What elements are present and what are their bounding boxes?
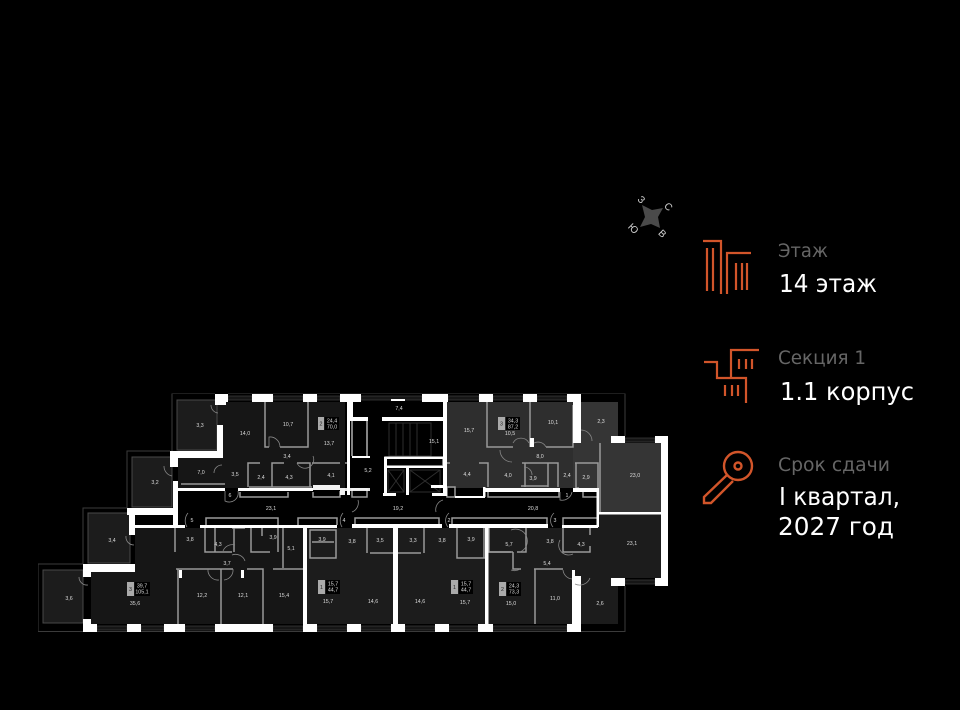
badge 73,3 <box>499 582 521 596</box>
room area labels: 3,2 <box>151 480 159 486</box>
room area labels: 3,3 <box>409 538 417 544</box>
badge 105,1: 105,1 <box>135 590 149 596</box>
room area labels: 10,1 <box>548 420 558 426</box>
room area labels: 4,3 <box>577 542 585 548</box>
room area labels: 23,1 <box>266 506 276 512</box>
room area labels: 2,4 <box>563 473 571 479</box>
room area labels: 1 <box>566 493 569 499</box>
room area labels: 14,0 <box>240 431 250 437</box>
room area labels: 10,5 <box>505 431 515 437</box>
badge 105,1: 39,7 <box>137 584 147 590</box>
room area labels: 3 <box>554 518 557 524</box>
window rails <box>97 396 655 630</box>
badge 73,3: 73,3 <box>509 590 519 596</box>
badge 44,7 right: 44,7 <box>461 588 471 594</box>
room area labels: 3,9 <box>318 537 326 543</box>
core walls and grey shafts <box>352 421 443 466</box>
delivery date text: I квартал, <box>779 482 900 511</box>
badge 73,3: 2 <box>501 587 504 593</box>
delivery date text <box>778 455 900 541</box>
badge 105,1: 3 <box>129 587 132 593</box>
icon: floor building <box>703 241 751 294</box>
room area labels: 6 <box>229 493 232 499</box>
badge 44,7 left <box>318 580 340 594</box>
compass letters: С <box>661 201 674 214</box>
section info text: 1.1 корпус <box>780 377 914 406</box>
room area labels: 15,7 <box>464 428 474 434</box>
balcony fills left <box>43 400 217 623</box>
room area labels: 7,0 <box>197 470 205 476</box>
badge 87,2: 87,2 <box>508 424 518 430</box>
floor info text: 14 этаж <box>779 269 877 298</box>
compass <box>625 194 674 241</box>
room area labels: 2 <box>448 518 451 524</box>
apartment 44,7 right fill <box>398 528 485 624</box>
badge 87,2: 3 <box>500 422 503 428</box>
apartment 87,2 fill <box>447 402 600 512</box>
room area labels: 5 <box>191 518 194 524</box>
doors <box>79 405 592 585</box>
badge 44,7 right <box>451 580 473 594</box>
room area labels: 3,3 <box>196 423 204 429</box>
room area labels: 3,9 <box>529 476 537 482</box>
load-bearing walls <box>83 394 668 632</box>
room area labels: 3,8 <box>546 539 554 545</box>
badge 70,0 <box>318 417 339 430</box>
room area labels: 2,4 <box>257 475 265 481</box>
badge 44,7 right: 15,7 <box>461 582 471 588</box>
room area labels: 8,0 <box>536 454 544 460</box>
delivery date text: 2027 год <box>778 512 894 541</box>
badge 105,1 <box>127 582 150 596</box>
room area labels: 15,1 <box>429 439 439 445</box>
badge 44,7 left: 44,7 <box>328 588 338 594</box>
room area labels: 3,4 <box>108 538 116 544</box>
compass star <box>640 205 663 228</box>
room area labels: 3,5 <box>376 538 384 544</box>
room area labels: 15,7 <box>323 599 333 605</box>
floor info text: Этаж <box>778 241 828 262</box>
room area labels: 7,4 <box>395 406 403 412</box>
room area labels: 14,6 <box>415 599 425 605</box>
room area labels: 4 <box>343 518 346 524</box>
badge 44,7 right: 1 <box>453 585 456 591</box>
room area labels: 2,3 <box>597 419 605 425</box>
icon: section building <box>704 350 759 403</box>
badge 70,0: 24,4 <box>327 418 337 424</box>
room area labels: 4,0 <box>504 473 512 479</box>
apartment 70,0 fill <box>178 402 345 488</box>
room area labels: 35,6 <box>130 601 140 607</box>
room area labels: 10,7 <box>283 422 293 428</box>
room area labels: 15,7 <box>460 600 470 606</box>
room area labels: 3,9 <box>467 537 475 543</box>
room area labels: 5,7 <box>505 542 513 548</box>
apartment 73,3 fill <box>488 514 661 624</box>
section info text <box>778 348 914 406</box>
room area labels: 15,4 <box>279 593 289 599</box>
room area labels: 14,6 <box>368 599 378 605</box>
room area labels: 2,6 <box>596 601 604 607</box>
room area labels: 5,1 <box>287 546 295 552</box>
icon: key <box>704 452 752 503</box>
room area labels: 3,8 <box>348 539 356 545</box>
room 23,0 fill <box>573 402 661 512</box>
section info text: Секция 1 <box>778 348 866 369</box>
room area labels: 19,2 <box>393 506 403 512</box>
room area labels: 12,1 <box>238 593 248 599</box>
room area labels: 3,5 <box>231 472 239 478</box>
badge 70,0: 70,0 <box>327 424 337 430</box>
room area labels <box>65 406 640 607</box>
room area labels: 3,7 <box>223 561 231 567</box>
room area labels: 12,2 <box>197 593 207 599</box>
apartment 44,7 left fill <box>307 528 393 624</box>
room area labels: 3,4 <box>283 454 291 460</box>
room area labels: 11,0 <box>550 596 560 602</box>
balcony outlines <box>38 394 625 632</box>
badge 87,2: 34,3 <box>508 418 518 424</box>
room area labels: 3,8 <box>438 538 446 544</box>
room area labels: 3,8 <box>186 537 194 543</box>
room area labels: 3,9 <box>269 535 277 541</box>
room area labels: 23,1 <box>627 541 637 547</box>
badge 73,3: 24,3 <box>509 584 519 590</box>
apartment badges <box>127 417 521 596</box>
room area labels: 3,6 <box>65 596 73 602</box>
room area labels: 23,0 <box>630 473 640 479</box>
floor info text <box>778 241 877 298</box>
compass letters: В <box>656 228 668 241</box>
badge 70,0: 2 <box>320 422 323 428</box>
badge 87,2 <box>498 417 520 430</box>
room area labels: 4,1 <box>327 473 335 479</box>
badge 44,7 left: 15,7 <box>328 582 338 588</box>
room area labels: 15,0 <box>506 601 516 607</box>
badge 44,7 left: 1 <box>320 585 323 591</box>
interior partitions <box>175 402 347 624</box>
delivery date text: Срок сдачи <box>778 455 890 476</box>
room area labels: 5,2 <box>364 468 372 474</box>
apartment fills <box>43 400 661 624</box>
room area labels: 20,8 <box>528 506 538 512</box>
apartment 105,1 fill <box>91 528 303 624</box>
compass letters <box>625 194 674 241</box>
floor plan <box>38 394 668 632</box>
room area labels: 2,9 <box>582 475 590 481</box>
room area labels: 5,4 <box>543 561 551 567</box>
compass letters: З <box>635 194 647 206</box>
room area labels: 4,4 <box>463 472 471 478</box>
core staircase and lifts <box>388 423 440 492</box>
room area labels: 4,3 <box>285 475 293 481</box>
room area labels: 13,7 <box>324 441 334 447</box>
compass letters: Ю <box>625 222 640 237</box>
room area labels: 4,3 <box>214 542 222 548</box>
